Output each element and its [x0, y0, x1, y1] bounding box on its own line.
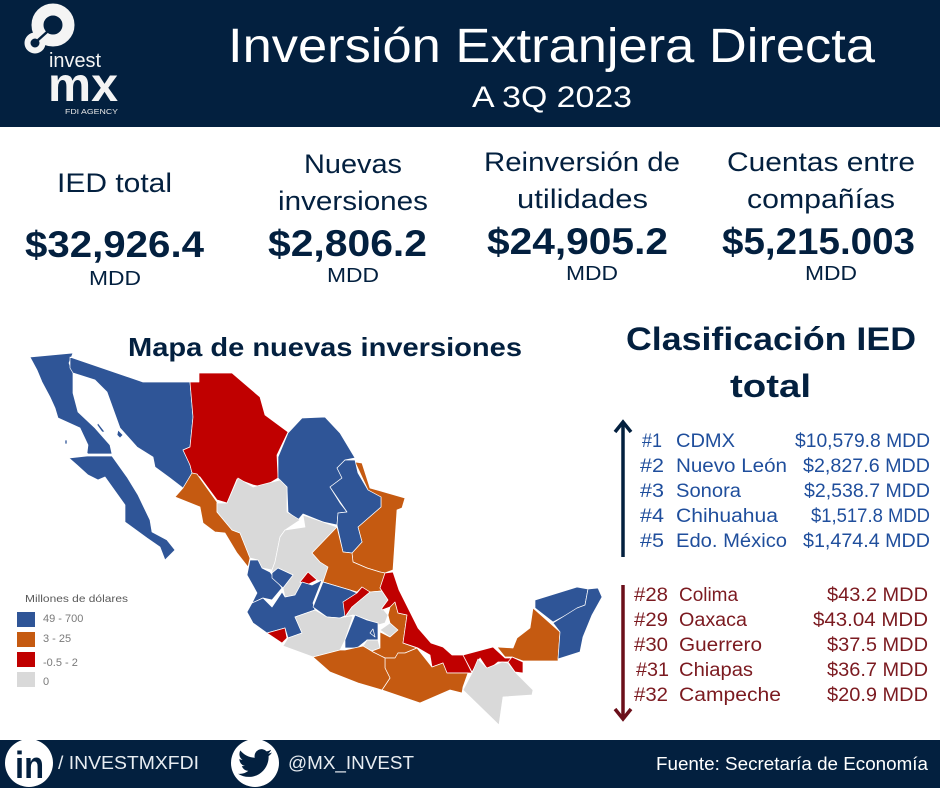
bottom five ranking — [634, 585, 928, 706]
stat: IED total: MDD — [89, 268, 141, 290]
top five ranking: $1,474.4 MDD — [803, 531, 930, 552]
top five ranking: #2 — [640, 456, 664, 477]
top five ranking: Sonora — [676, 481, 741, 502]
top five ranking: $10,579.8 MDD — [795, 431, 930, 452]
ranking heading — [626, 321, 916, 404]
stat: Cuentas entre compañías: MDD — [805, 263, 857, 285]
bottom five ranking: #30 — [634, 635, 668, 656]
logo: invest mx: FDI AGENCY — [65, 107, 118, 116]
stat: Reinversión de utilidades — [484, 147, 680, 285]
bottom five ranking: $36.7 MDD — [827, 660, 928, 681]
bottom five ranking: #28 — [634, 585, 668, 606]
map legend: -0.5 - 2 — [43, 657, 78, 669]
stat: IED total: IED total — [57, 168, 172, 198]
icon: linkedin: in — [15, 745, 44, 787]
stat: Reinversión de utilidades: Reinversión de — [484, 147, 680, 177]
bottom five ranking: Campeche — [679, 685, 781, 706]
stat: Cuentas entre compañías: $5,215.003 — [722, 221, 915, 262]
top five ranking: #5 — [640, 531, 664, 552]
logo: invest mx — [28, 10, 118, 116]
stat: Reinversión de utilidades: $24,905.2 — [487, 221, 668, 262]
bottom five ranking: Chiapas — [679, 660, 753, 681]
bottom five ranking: Colima — [679, 585, 738, 606]
arrow: up — [615, 422, 631, 557]
icon: twitter — [231, 739, 279, 787]
stat: Reinversión de utilidades: MDD — [566, 263, 618, 285]
header band — [0, 0, 940, 127]
stat: IED total: $32,926.4 — [25, 224, 204, 265]
top five ranking: $1,517.8 MDD — [811, 506, 930, 527]
top five ranking — [640, 431, 930, 552]
arrow: down — [615, 585, 631, 719]
top five ranking: #3 — [640, 481, 664, 502]
stat: Nuevas inversiones — [268, 149, 428, 287]
ranking heading: Clasificación IED — [626, 321, 916, 357]
bottom five ranking: #29 — [634, 610, 668, 631]
map legend: 49 - 700 — [43, 613, 83, 625]
top five ranking: CDMX — [676, 431, 735, 452]
stat: Cuentas entre compañías — [722, 147, 915, 285]
map legend: 0 — [43, 676, 49, 688]
map legend — [17, 593, 128, 688]
stat: Cuentas entre compañías: Cuentas entre — [727, 147, 915, 177]
source note: Fuente: Secretaría de Economía — [656, 754, 929, 774]
bottom five ranking: #31 — [636, 660, 669, 681]
stat: IED total — [25, 168, 204, 290]
subtitle: A 3Q 2023 — [472, 81, 632, 114]
icon: linkedin — [5, 739, 53, 787]
choropleth map of Mexico — [30, 353, 602, 725]
stat: Nuevas inversiones: Nuevas — [304, 149, 402, 179]
stat: Nuevas inversiones: $2,806.2 — [268, 223, 427, 264]
stat: Reinversión de utilidades: utilidades — [517, 184, 648, 214]
bottom five ranking: $20.9 MDD — [827, 685, 928, 706]
top five ranking: Edo. México — [676, 531, 787, 552]
bottom five ranking: #32 — [634, 685, 668, 706]
top five ranking: #4 — [640, 506, 664, 527]
bottom five ranking: $43.2 MDD — [827, 585, 928, 606]
top five ranking: #1 — [642, 431, 662, 452]
top five ranking: $2,827.6 MDD — [803, 456, 930, 477]
stat: Nuevas inversiones: MDD — [327, 265, 379, 287]
bottom five ranking: Oaxaca — [679, 610, 747, 631]
title: Inversión Extranjera Directa — [228, 20, 875, 73]
stat: Nuevas inversiones: inversiones — [278, 186, 428, 216]
footer band — [0, 739, 940, 788]
bottom five ranking: $43.04 MDD — [813, 610, 928, 631]
top five ranking: Nuevo León — [676, 456, 787, 477]
map heading: Mapa de nuevas inversiones — [128, 332, 522, 362]
logo: invest mx: invest — [49, 50, 101, 72]
top five ranking: $2,538.7 MDD — [804, 481, 930, 502]
bottom five ranking: Guerrero — [679, 635, 762, 656]
bottom five ranking: $37.5 MDD — [827, 635, 928, 656]
top five ranking: Chihuahua — [676, 506, 778, 527]
linkedin handle: / INVESTMXFDI — [58, 753, 199, 773]
logo: invest mx: mx — [48, 59, 118, 112]
ranking heading: total — [730, 368, 811, 404]
stat: Cuentas entre compañías: compañías — [747, 184, 895, 214]
twitter handle: @MX_INVEST — [288, 753, 414, 774]
map legend: Millones de dólares — [25, 593, 128, 605]
map legend: 3 - 25 — [43, 633, 71, 645]
